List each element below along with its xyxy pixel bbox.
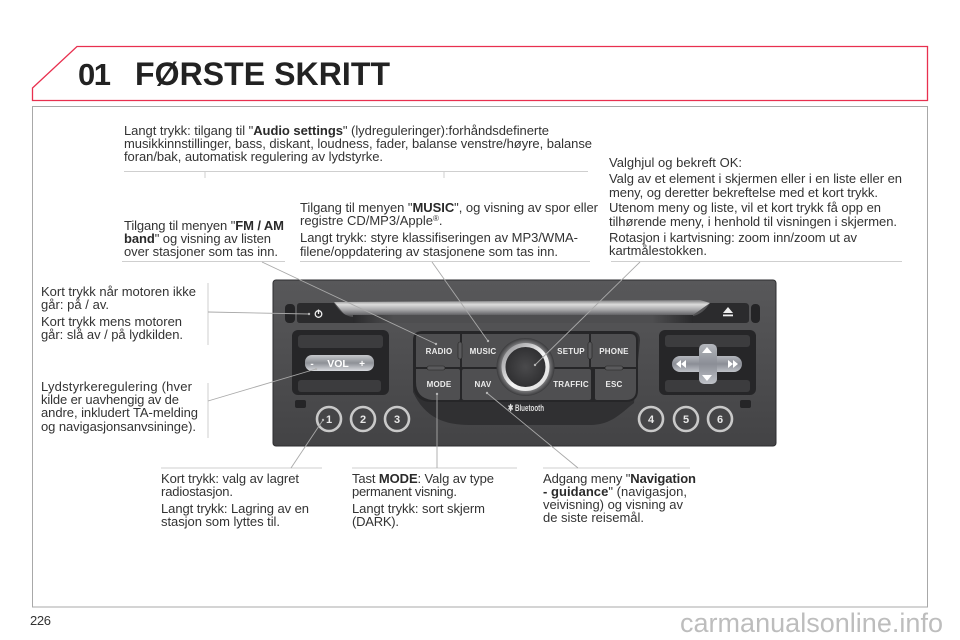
main content panel [32,106,928,607]
title: FØRSTE SKRITT [135,56,390,92]
text: FM / AM band: Tilgang til menyen "FM / AM [124,218,284,233]
text: volume control: kilde er uavhengig av de [41,392,179,407]
text: volume control: Lydstyrkeregulering (hver [41,379,193,394]
text: FM / AM band: over stasjoner som tas inn. [124,244,278,259]
text: NAV button [543,471,696,525]
text: preset buttons: radiostasjon. [161,484,233,499]
Bluetooth label: ✱ Bluetooth [508,403,544,414]
text: volume control [41,379,198,434]
text: MUSIC: filene/oppdatering av stasjonene som tas inn. [300,244,558,259]
centre button cluster: TRAFFIC [553,380,589,389]
text: volume control: andre, inkludert TA-melding [41,405,198,420]
watermark: carmanualsonline.info [680,608,943,638]
text: MUSIC: Langt trykk: styre klassifiseringen av MP3/WMA- [300,230,578,245]
text: power button: Kort trykk når motoren ikke [41,284,196,299]
volume control: VOL [327,358,349,370]
power button [285,303,353,323]
text: MODE button: permanent visning. [352,484,457,499]
text: audio settings: Langt trykk: tilgang til "Audio settings" (lydreguleringer):forhåndsdefinerte [124,123,549,138]
text: preset buttons: Kort trykk: valg av lagret [161,471,299,486]
text: rotary knob: Rotasjon i kartvisning: zoom inn/zoom ut av [609,230,858,245]
text: rotary knob: Valg av et element i skjermen eller i en liste eller en [609,171,902,186]
centre button cluster: RADIO [426,347,452,356]
text: FM / AM band [124,218,284,259]
text: rotary knob: meny, og deretter bekreftelse med et kort trykk. [609,185,878,200]
text: MUSIC [300,200,599,259]
navigation arrow pad [659,330,756,395]
preset buttons 1 to 6: 5 [683,414,689,426]
text: power button: går: på / av. [41,297,109,312]
text: rotary knob: kartmålestokken. [609,243,707,258]
chapter number: 01 [78,57,111,92]
text: NAV button: Adgang meny "Navigation [543,471,696,486]
text: preset buttons: Langt trykk: Lagring av en [161,501,309,516]
preset buttons 1 to 6: 4 [648,414,655,426]
text: MODE button: (DARK). [352,514,399,529]
centre button cluster: MODE [427,380,452,389]
volume control [292,330,389,395]
text: NAV button: - guidance" (navigasjon, [543,484,687,499]
centre button cluster: NAV [475,380,492,389]
centre button cluster: PHONE [599,347,629,356]
text: power button [41,284,196,342]
text: audio settings: musikkinnstillinger, bass, diskant, loudness, fader, balanse venstre/høyre, balanse [124,136,592,151]
leader lines [208,262,640,468]
text: MUSIC: ® [433,214,439,223]
radio faceplate [273,280,776,446]
text: power button: går: slå av / på lydkilden. [41,327,183,342]
text: volume control: og navigasjonsanvsininge). [41,419,196,434]
text: rotary knob: tilhørende meny, i henhold til visningen i skjermen. [609,214,897,229]
volume control: - [310,359,314,370]
CD slot [334,300,710,323]
rotary knob [496,338,554,396]
preset buttons 1 to 6: 3 [394,414,400,426]
text: MUSIC: Tilgang til menyen "MUSIC", og visning av spor eller [300,200,599,215]
text: NAV button: de siste reisemål. [543,510,644,525]
centre button cluster: MUSIC [470,347,496,356]
header banner [32,46,928,100]
text: rotary knob [609,155,902,258]
text: power button: Kort trykk mens motoren [41,314,182,329]
preset buttons 1 to 6 [317,407,732,431]
text: audio settings [124,123,592,164]
centre button cluster: SETUP [557,347,585,356]
centre button cluster: ESC [605,380,623,389]
preset buttons 1 to 6: 2 [360,414,366,426]
text: preset buttons [161,471,309,529]
text: MODE button: Tast MODE: Valg av type [352,471,494,486]
text: FM / AM band: band" og visning av listen [124,231,271,246]
eject button [693,303,760,323]
text: MUSIC: . [439,213,442,228]
text: rotary knob: Utenom meny og liste, vil et kort trykk få opp en [609,200,881,215]
preset buttons 1 to 6: 1 [326,414,332,426]
radio unit illustration [273,280,776,446]
text: audio settings: foran/bak, automatisk regulering av lydstyrke. [124,149,383,164]
text: MODE button [352,471,494,529]
preset buttons 1 to 6: 6 [717,414,723,426]
text: MODE button: Langt trykk: sort skjerm [352,501,485,516]
page number: 226 [30,613,51,628]
volume control: + [359,359,365,370]
text: rotary knob: Valghjul og bekreft OK: [609,155,742,170]
centre button cluster [413,331,640,425]
text: MUSIC: registre CD/MP3/Apple [300,213,433,228]
text: NAV button: veivisning) og visning av [543,497,684,512]
text: preset buttons: stasjon som lyttes til. [161,514,280,529]
